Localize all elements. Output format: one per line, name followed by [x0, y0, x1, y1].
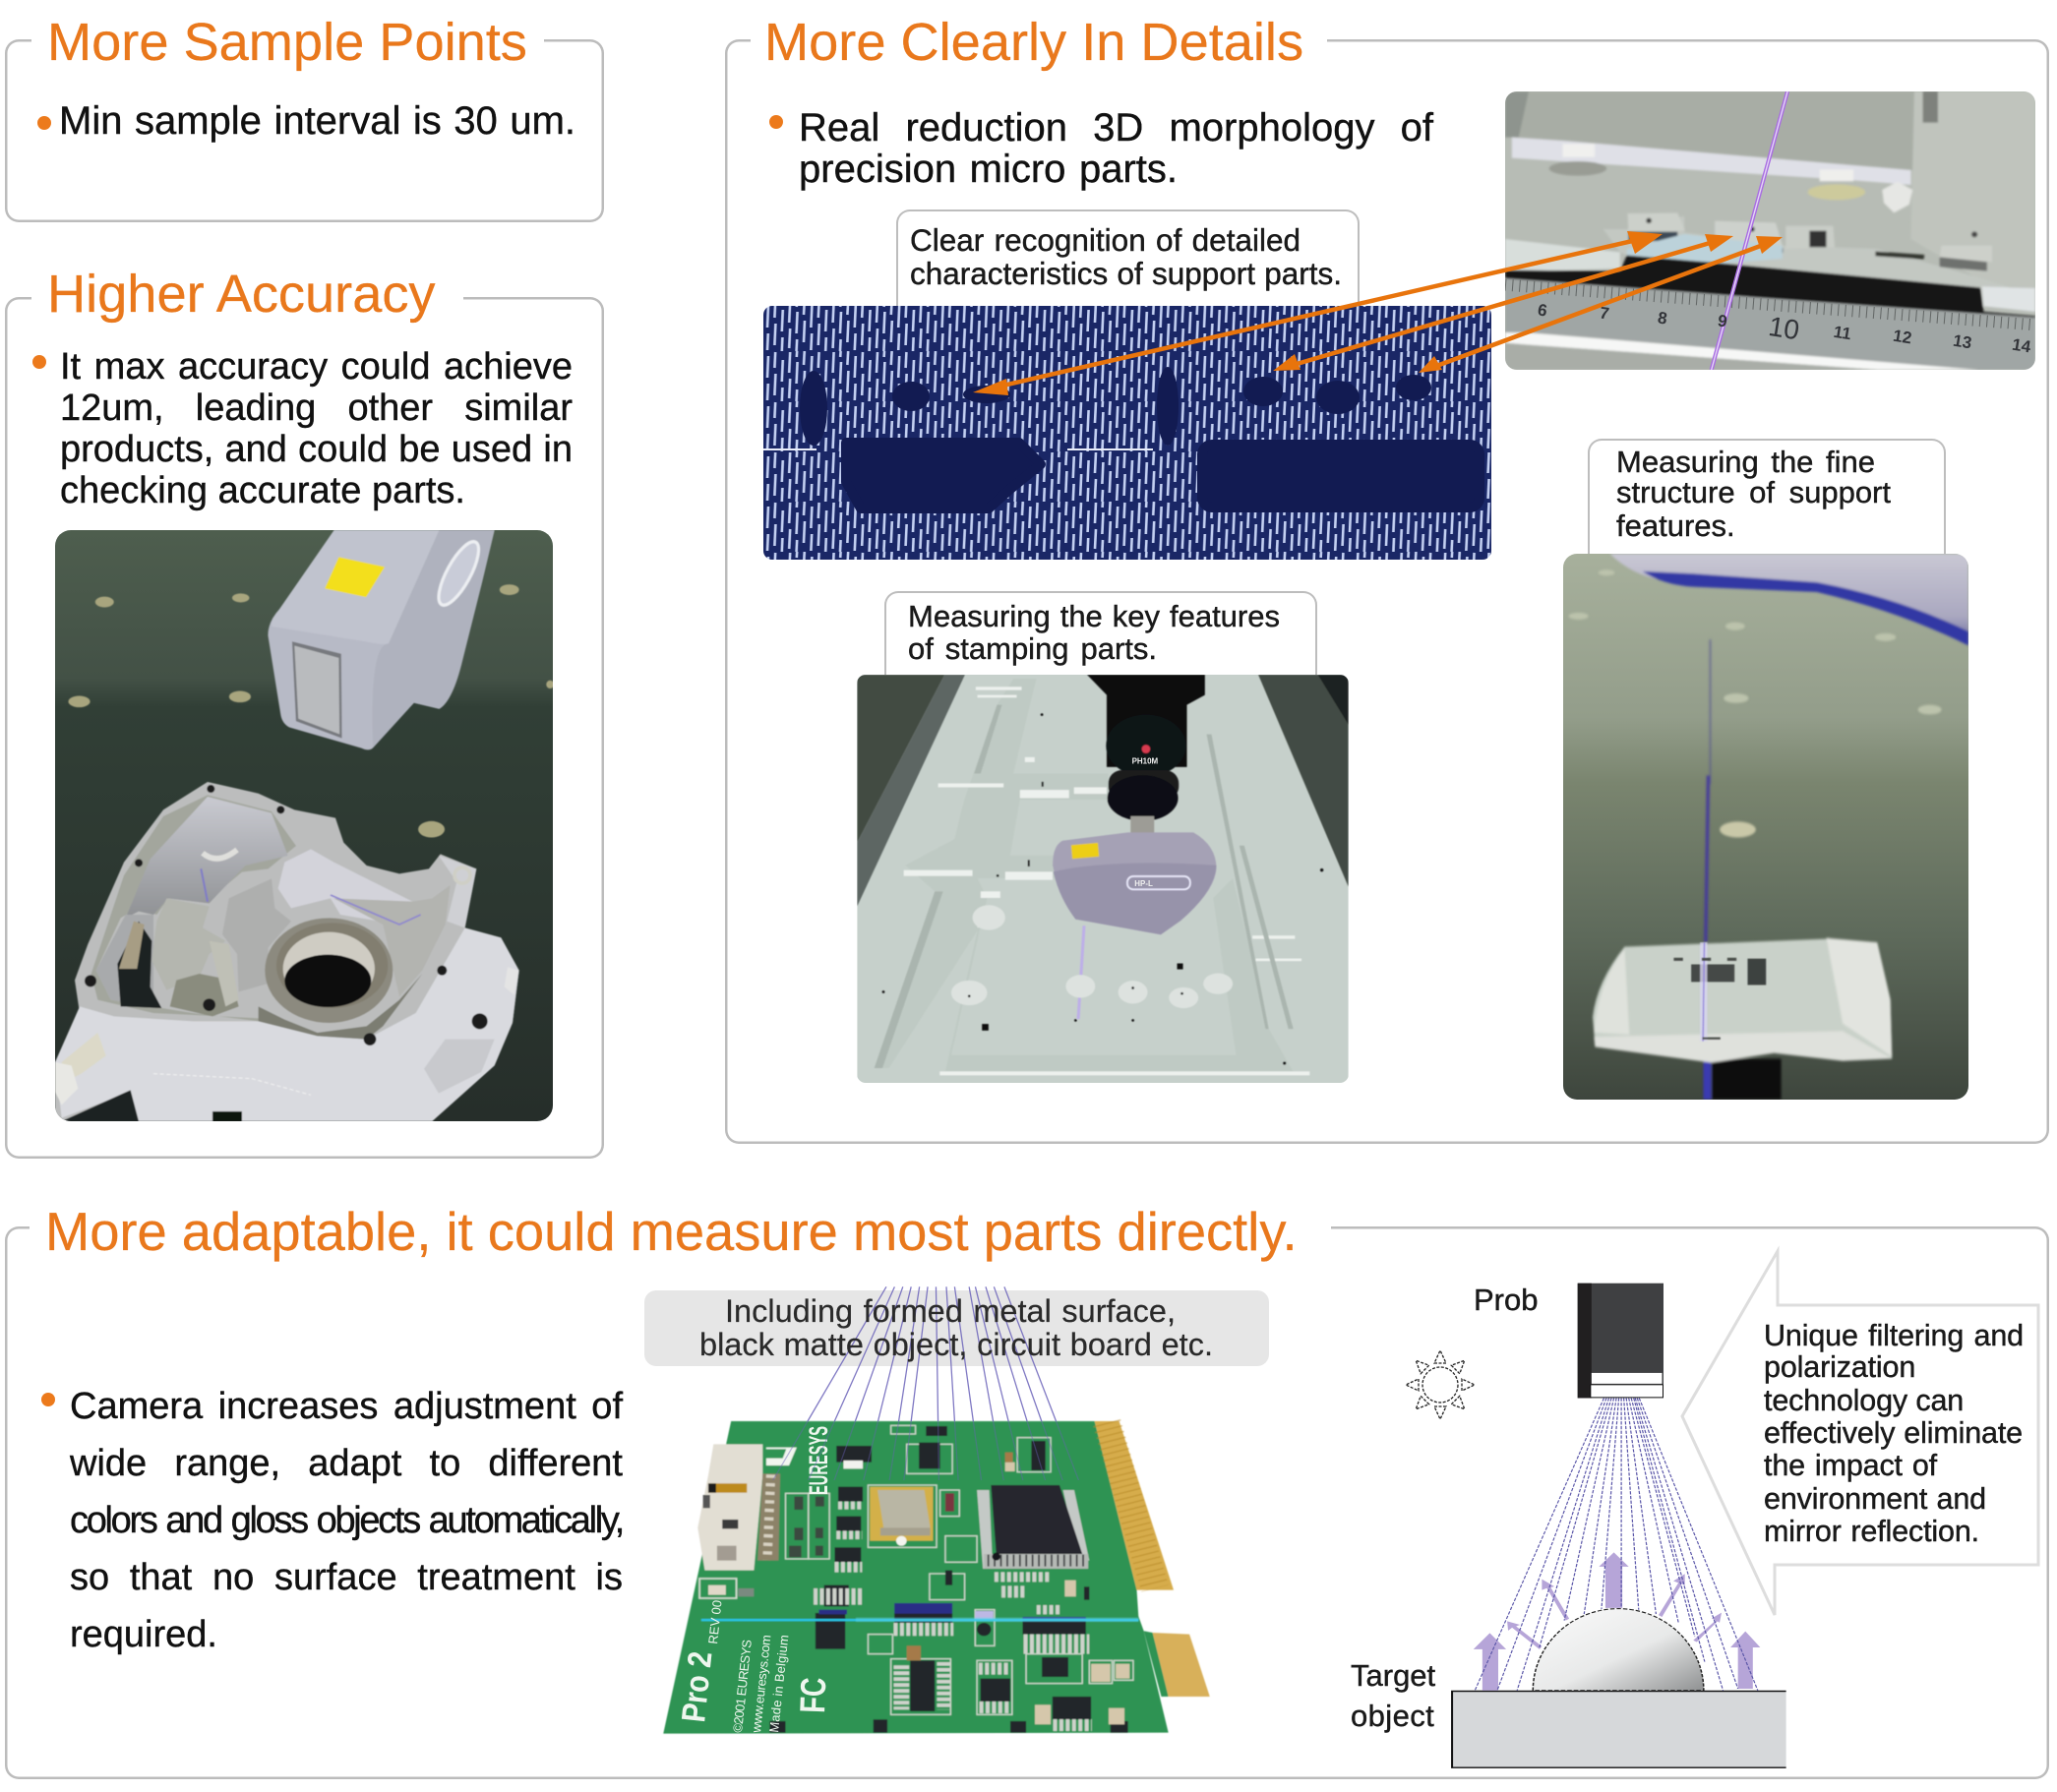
arrow 1: [973, 231, 1663, 395]
bullet dot: [769, 115, 783, 129]
main QFP chip: [977, 1490, 993, 1569]
casting body: [55, 782, 519, 1121]
callout outline: [1682, 1251, 2038, 1615]
photo: probe measuring stamped plate: HP-L: [1134, 879, 1153, 888]
heading: More Clearly In Details: More Clearly In Details: [764, 13, 1303, 72]
icon: sun: [1406, 1350, 1475, 1419]
arrow 3: [1419, 236, 1783, 373]
ruler numbers: [1537, 300, 2032, 357]
panel: more clearly in details: [725, 39, 2049, 1144]
callout: stamping parts: of stamping parts.: [908, 631, 1157, 666]
ruler numbers: 10: [1767, 311, 1801, 345]
ruler numbers: 11: [1832, 323, 1852, 343]
callout: detailed characteristics: characteristics of support parts.: [910, 256, 1342, 291]
callout text: filtering technology: mirror reflection.: [1764, 1515, 1979, 1548]
chips: [769, 1426, 1128, 1733]
note text: surface types: [699, 1292, 1213, 1362]
label: Target object: Target: [1351, 1658, 1435, 1693]
photo: probe measuring stamped plate: PH10M: [1132, 757, 1159, 766]
ruler numbers: 8: [1657, 308, 1668, 329]
photo: circuit board: ©2001 EURESYS: [730, 1639, 755, 1733]
diagram: probe, rays and target object: [1406, 1245, 2040, 1768]
heading: More adaptable: More adaptable, it could measure most parts directly.: [45, 1202, 1298, 1262]
text block: camera adjustment: Camera increases adjustment of: [70, 1386, 623, 1427]
text block: accuracy description: It max accuracy could achieve: [60, 346, 573, 388]
text block: accuracy description: checking accurate parts.: [60, 470, 465, 511]
passives: [1005, 1463, 1129, 1724]
arrow 2: [1273, 234, 1733, 371]
text block: 3D morphology: precision micro parts.: [799, 148, 1178, 191]
callout: fine structure: [1588, 439, 1946, 562]
bullet dot: [32, 355, 46, 369]
connector: [697, 1444, 762, 1571]
image: point cloud scan: [763, 306, 1491, 560]
ruler numbers: 9: [1717, 311, 1728, 331]
photo: probe measuring stamped plate: [857, 675, 1349, 1083]
light rays onto board: [772, 1286, 1079, 1480]
callout: stamping parts: Measuring the key features: [908, 599, 1280, 633]
callout text: filtering technology: Unique filtering and: [1764, 1319, 2024, 1352]
target object base: [1452, 1691, 1786, 1767]
text block: camera adjustment: colors and gloss objects automatically,: [70, 1500, 623, 1541]
arrows: orange links from part to scan: [973, 231, 1783, 395]
photo: circuit board: REV 00: [705, 1599, 725, 1644]
text block: accuracy description: products, and could be used in: [60, 429, 573, 470]
text block: camera adjustment: wide range, adapt to different: [70, 1443, 623, 1484]
text block: camera adjustment: required.: [70, 1614, 217, 1655]
bullet dot: [37, 116, 51, 130]
photo: circuit board: [663, 1418, 1210, 1735]
photo: laser probe above aluminium casting: [55, 530, 553, 1121]
panel: more sample points: [5, 39, 604, 222]
callout: detailed characteristics: Clear recognition of detailed: [910, 222, 1301, 258]
panel: more adaptable: [5, 1226, 2049, 1779]
note text: surface types: Including formed metal surface,: [725, 1292, 1176, 1328]
purple reflection arrows: [1474, 1552, 1760, 1691]
ruler numbers: 6: [1537, 300, 1548, 321]
text block: 3D morphology: [799, 106, 1434, 191]
photo: circuit board: Pro 2: [675, 1649, 719, 1724]
photo: circuit board: www.euresys.com: [749, 1634, 773, 1734]
text block: 3D morphology: Real reduction 3D morphology of: [799, 106, 1433, 149]
ruler numbers: 12: [1892, 327, 1913, 347]
callout: fine structure: Measuring the fine: [1616, 445, 1875, 479]
label: Target object: object: [1351, 1699, 1434, 1733]
photo: circuit board: FC: [792, 1677, 833, 1713]
callout text: filtering technology: environment and: [1764, 1482, 1986, 1516]
callout text: filtering technology: effectively eliminate: [1764, 1416, 2023, 1450]
probe head: [1578, 1284, 1664, 1398]
text block: camera adjustment: so that no surface treatment is: [70, 1557, 623, 1598]
photo: support part with ruler: [1505, 91, 2035, 370]
callout text: filtering technology: the impact of: [1764, 1449, 1937, 1482]
heading: More Sample Points: More Sample Points: [47, 13, 527, 72]
label: Target object: [1351, 1658, 1436, 1733]
callout: fine structure: features.: [1616, 508, 1735, 543]
callout: fine structure: structure of support: [1616, 475, 1891, 509]
ruler numbers: 7: [1599, 303, 1610, 324]
note background: grey box: [644, 1290, 1269, 1366]
dashed rays: [1475, 1398, 1758, 1691]
callout text: filtering technology: technology can: [1764, 1384, 1964, 1417]
text: min sample interval: Min sample interval is 30 um.: [59, 99, 575, 143]
heading: Higher Accuracy: Higher Accuracy: [47, 265, 436, 324]
text block: camera adjustment: [69, 1386, 624, 1655]
small parts column: [789, 1497, 824, 1557]
label: Prob: Prob: [1474, 1283, 1538, 1317]
text block: accuracy description: [60, 346, 573, 511]
note text: surface types: black matte object, circuit board etc.: [699, 1326, 1213, 1361]
ruler numbers: 14: [2011, 335, 2032, 357]
photo: circuit board: Made in Belgium: [766, 1634, 791, 1733]
callout text: filtering technology: [1764, 1319, 2024, 1548]
callout text: filtering technology: polarization: [1764, 1350, 1915, 1384]
ruler numbers: 13: [1952, 331, 1973, 352]
bullet dot: [41, 1393, 55, 1406]
crystal: [870, 1487, 933, 1541]
panel: higher accuracy: [5, 297, 604, 1159]
photo: scanning line across support part: [1563, 554, 1968, 1100]
callout: detailed characteristics: [896, 209, 1360, 318]
text block: accuracy description: 12um, leading other similar: [60, 388, 573, 429]
pins: [814, 1506, 1092, 1725]
callout: stamping parts: [884, 591, 1317, 719]
dome: [1533, 1609, 1704, 1691]
